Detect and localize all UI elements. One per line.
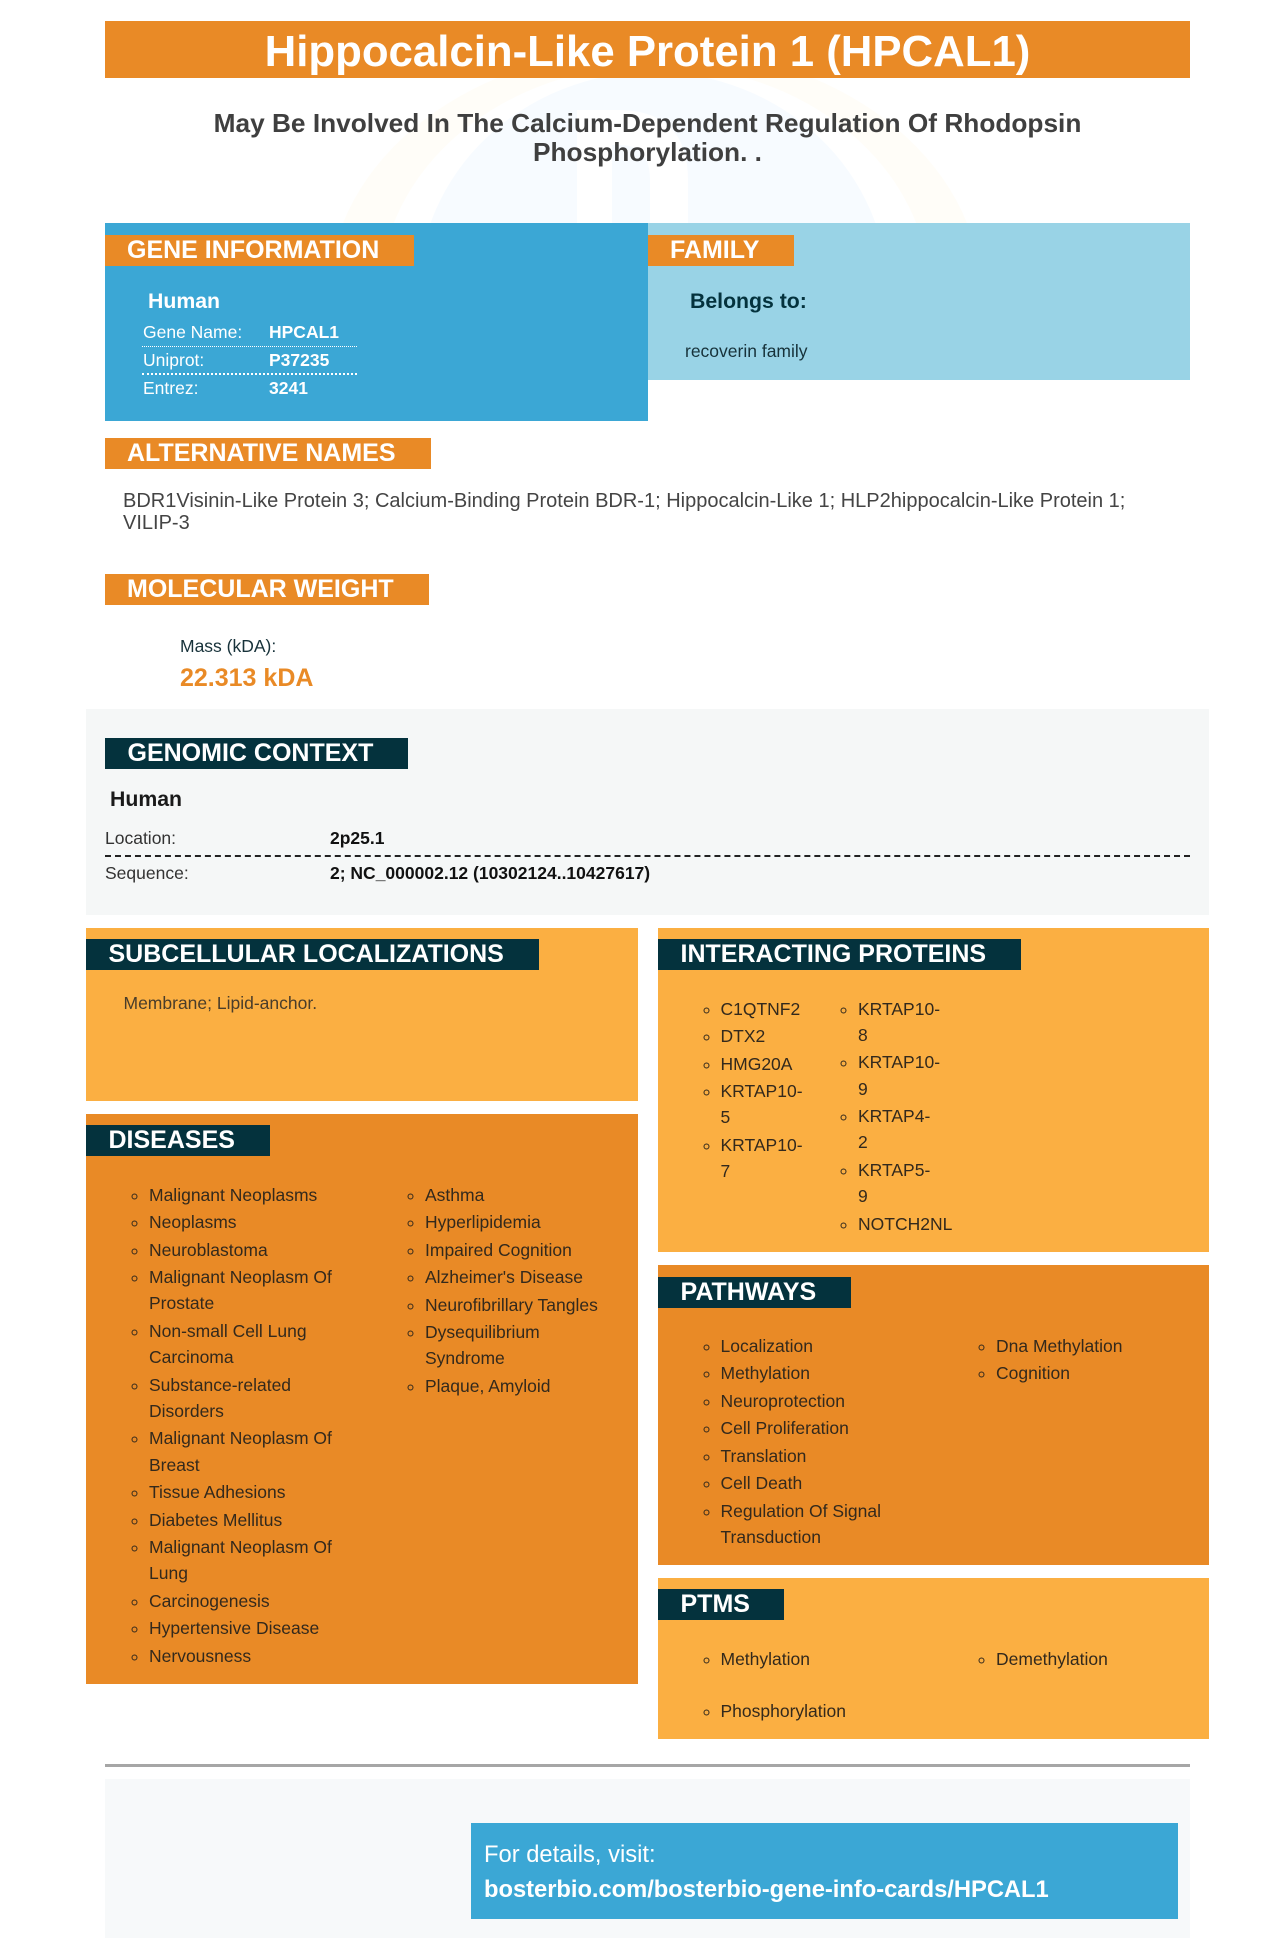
sequence row: 2; NC_000002.12 (10302124..10427617) [330,863,650,883]
gene name row: Gene Name: [143,322,242,342]
disease list column 1: Breast [149,1455,200,1475]
protein list column 2: 2 [858,1132,868,1152]
disease list column 2: Impaired Cognition [425,1240,572,1260]
location row: Location: [105,828,176,848]
callout: details link [471,1823,1178,1919]
disease list column 1 [132,1185,332,1666]
pathway list column 1: Regulation Of Signal [720,1500,881,1520]
visit label: For details, visit: [484,1840,656,1868]
mass value: 22.313 kDA [180,664,313,692]
heading: ptms: PTMS [680,1590,750,1618]
disease list column 1: Non-small Cell Lung [149,1321,307,1341]
panel: ptms [658,1578,1209,1739]
location row [105,828,384,848]
protein list column 2: NOTCH2NL [858,1214,952,1234]
panel: genomic context [86,709,1209,915]
panel: subcellular localizations [86,928,638,1101]
protein list column 1 [704,999,803,1181]
panel: diseases [86,1114,638,1684]
disease list column 1: Neuroblastoma [149,1240,268,1260]
disease list column 2: Asthma [425,1185,484,1205]
heading: family [648,235,794,266]
pathway list column 2 [978,1336,1122,1383]
disease list column 1: Malignant Neoplasms [149,1185,317,1205]
entrez row: Entrez: [143,378,198,398]
heading: diseases: DISEASES [108,1126,235,1154]
disease list column 1: Hypertensive Disease [149,1618,319,1638]
species label: Human [110,787,182,811]
disease list column 1: Lung [149,1563,188,1583]
location row: 2p25.1 [330,828,384,848]
protein list column 1: 5 [720,1107,730,1127]
pathway list column 2: Dna Methylation [996,1336,1122,1356]
pathway list column 2: Cognition [996,1363,1070,1383]
ptm list column 1: Phosphorylation [720,1701,846,1721]
pathway list column 1 [704,1336,881,1547]
disease list column 1: Neoplasms [149,1212,237,1232]
protein list column 1: C1QTNF2 [720,999,800,1019]
disease list column 1: Malignant Neoplasm Of [149,1537,332,1557]
panel: footer [105,1779,1190,1938]
subtitle: May Be Involved In The Calcium-Dependent Regulation Of Rhodopsin [214,108,1081,138]
sequence row [105,863,650,883]
heading: diseases [86,1125,270,1156]
subtitle: Phosphorylation. . [533,137,762,167]
entrez row: 3241 [269,378,308,398]
protein list column 1: KRTAP10- [720,1081,803,1101]
protein list column 1: KRTAP10- [720,1135,803,1155]
disease list column 1: Tissue Adhesions [149,1482,286,1502]
title: Hippocalcin-Like Protein 1 (HPCAL1) [265,27,1030,76]
pathway list column 1: Cell Proliferation [720,1418,849,1438]
protein list column 2: KRTAP10- [858,999,940,1019]
title [105,21,1190,78]
mass label: Mass (kDA): [180,636,276,656]
disease list column 1: Prostate [149,1293,214,1313]
heading: gene information: GENE INFORMATION [127,236,379,264]
disease list column 1: Nervousness [149,1646,251,1666]
disease list column 1: Carcinogenesis [149,1591,270,1611]
protein list column 2: KRTAP10- [858,1052,940,1072]
entrez row [143,378,308,398]
species label: Human [148,289,220,313]
ptm list column 2: Demethylation [996,1649,1108,1669]
disease list column 1: Carcinoma [149,1347,234,1367]
pathway list column 1: Cell Death [720,1473,802,1493]
disease list column 2: Syndrome [425,1348,505,1368]
pathway list column 1: Localization [720,1336,813,1356]
gene name row [143,322,339,342]
sequence row: Sequence: [105,863,189,883]
heading: subcellular localizations: SUBCELLULAR LOCALIZATIONS [108,940,504,968]
uniprot row: Uniprot: [143,350,204,370]
protein list column 2: KRTAP5- [858,1160,930,1180]
gene name row: HPCAL1 [269,322,339,342]
panel: interacting proteins [658,928,1209,1252]
watermark [300,78,1020,223]
pathway list column 1: Translation [720,1446,806,1466]
heading: alternative names: ALTERNATIVE NAMES [127,439,396,467]
disease list column 2: Neurofibrillary Tangles [425,1295,598,1315]
panel: gene information [105,223,648,421]
heading: interacting proteins: INTERACTING PROTEINS [680,940,986,968]
pathway list column 1: Transduction [720,1527,821,1547]
ptm list column 1: Methylation [720,1649,810,1669]
subtitle [214,108,1081,167]
protein list column 2: 8 [858,1025,868,1045]
belongs to label: Belongs to: [690,289,807,313]
uniprot row: P37235 [269,350,329,370]
pathway list column 1: Methylation [720,1363,810,1383]
disease list column 2: Dysequilibrium [425,1322,540,1342]
localization text: Membrane; Lipid-anchor. [124,993,317,1013]
disease list column 1: Malignant Neoplasm Of [149,1428,332,1448]
disease list column 1: Substance-related [149,1375,291,1395]
heading: genomic context: GENOMIC CONTEXT [128,739,373,767]
protein list column 1: DTX2 [720,1026,765,1046]
disease list column 2: Hyperlipidemia [425,1212,541,1232]
heading: pathways [658,1277,851,1308]
ptm list column 1 [704,1649,846,1721]
protein list column 2: 9 [858,1186,868,1206]
uniprot row [143,350,329,370]
protein list column 2: 9 [858,1079,868,1099]
panel: pathways [658,1265,1209,1565]
disease list column 1: Diabetes Mellitus [149,1510,282,1530]
url: bosterbio.com/bosterbio-gene-info-cards/HPCAL1 [484,1876,1049,1903]
heading: pathways: PATHWAYS [680,1278,816,1306]
disease list column 2: Alzheimer's Disease [425,1267,583,1287]
disease list column 1: Disorders [149,1401,224,1421]
alternative names text: BDR1Visinin-Like Protein 3; Calcium-Binding Protein BDR-1; Hippocalcin-Like 1; HLP2hippocalcin-Like Protein 1; VILIP-3 [123,490,1125,534]
protein list column 2 [840,999,952,1234]
disease list column 2 [408,1185,598,1396]
protein list column 1: HMG20A [720,1054,792,1074]
protein list column 2: KRTAP4- [858,1106,930,1126]
protein list column 1: 7 [720,1161,730,1181]
heading: molecular weight: MOLECULAR WEIGHT [127,575,394,603]
disease list column 2: Plaque, Amyloid [425,1376,550,1396]
heading: ptms [658,1589,784,1620]
family value: recoverin family [685,341,808,361]
disease list column 1: Malignant Neoplasm Of [149,1267,332,1287]
pathway list column 1: Neuroprotection [720,1390,845,1410]
heading: family: FAMILY [670,236,759,264]
panel: family [648,223,1190,380]
